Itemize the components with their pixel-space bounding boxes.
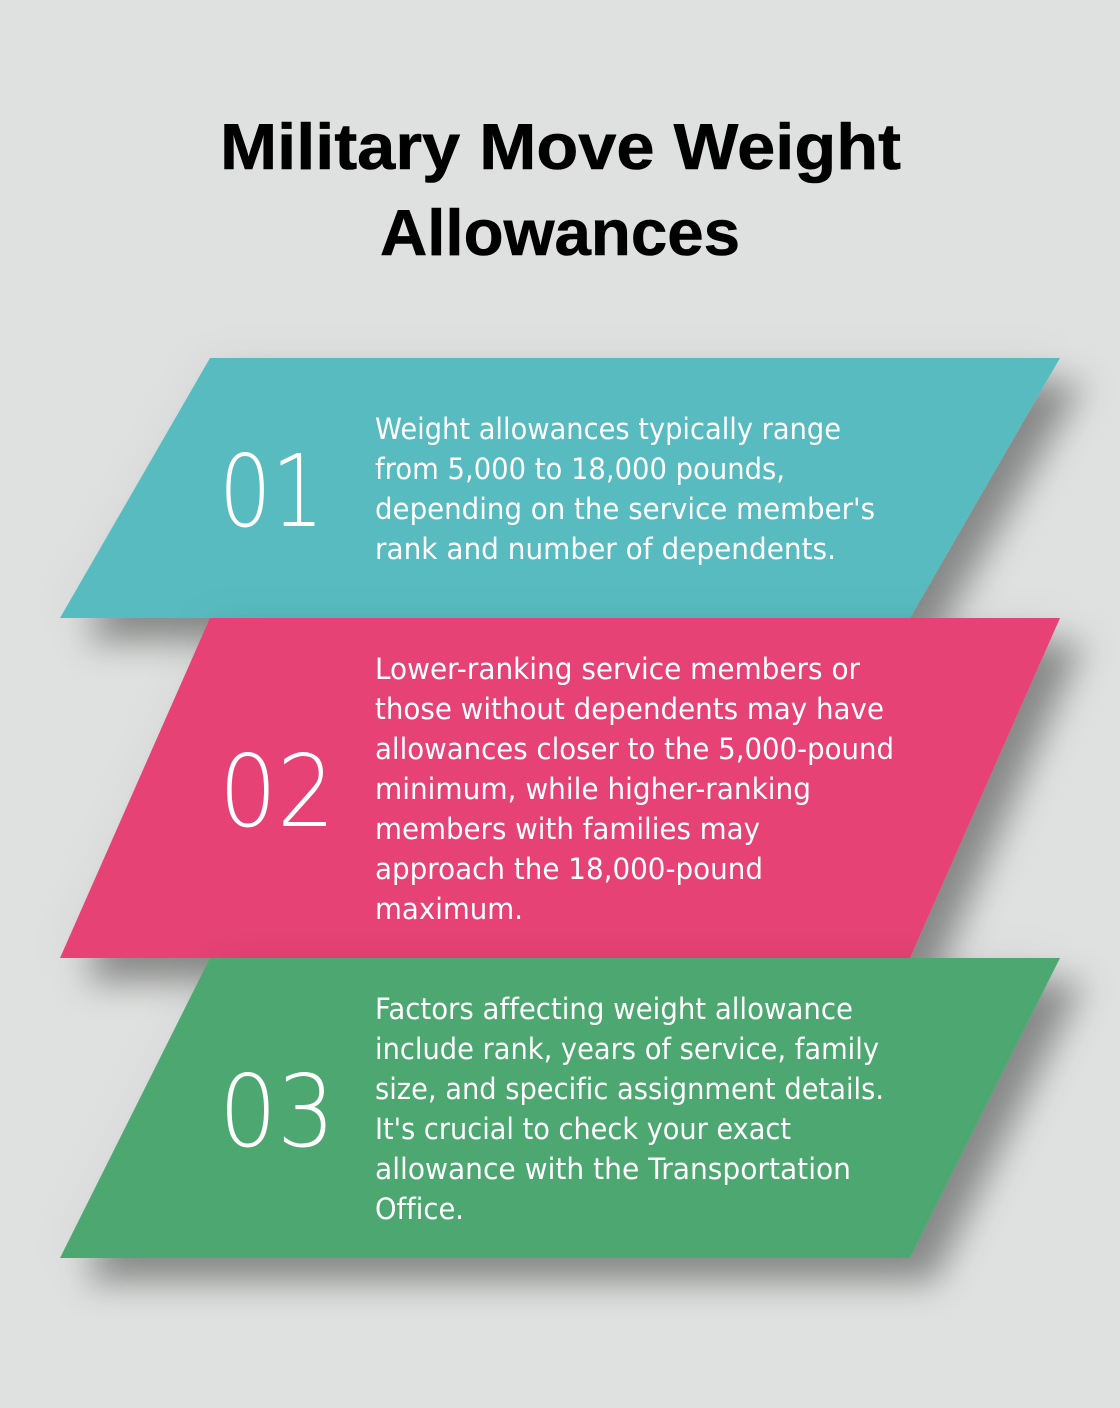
teal parallelogram [60, 358, 1060, 618]
text block 02: approach the 18,000-pound [375, 852, 763, 886]
pink parallelogram [60, 618, 1060, 958]
title [220, 110, 901, 269]
text block 01: from 5,000 to 18,000 pounds, [375, 452, 785, 486]
text block 02: minimum, while higher-ranking [375, 772, 811, 806]
number 03: 03 [219, 1053, 335, 1170]
text block 02: Lower-ranking service members or [375, 652, 860, 686]
text block 03: It's crucial to check your exact [375, 1112, 791, 1146]
number 02: 02 [219, 733, 335, 850]
panel: step 01 [60, 358, 1060, 618]
number 01: 01 [219, 433, 324, 550]
text block 02 [375, 652, 894, 926]
text block 02: those without dependents may have [375, 692, 884, 726]
text block 02: allowances closer to the 5,000-pound [375, 732, 894, 766]
text block 01: Weight allowances typically range [375, 412, 841, 446]
text block 03 [375, 992, 884, 1226]
text block 01: rank and number of dependents. [375, 532, 836, 566]
panel: step 03 [60, 958, 1060, 1258]
title: Military Move Weight [220, 110, 901, 183]
text block 03: include rank, years of service, family [375, 1032, 879, 1066]
text block 03: allowance with the Transportation [375, 1152, 851, 1186]
text block 01: depending on the service member's [375, 492, 875, 526]
title: Allowances [380, 196, 740, 269]
text block 03: size, and specific assignment details. [375, 1072, 884, 1106]
text block 02: maximum. [375, 892, 523, 926]
text block 01 [375, 412, 875, 566]
text block 03: Factors affecting weight allowance [375, 992, 853, 1026]
green parallelogram [60, 958, 1060, 1258]
text block 02: members with families may [375, 812, 760, 846]
panel: step 02 [60, 618, 1060, 958]
text block 03: Office. [375, 1192, 464, 1226]
